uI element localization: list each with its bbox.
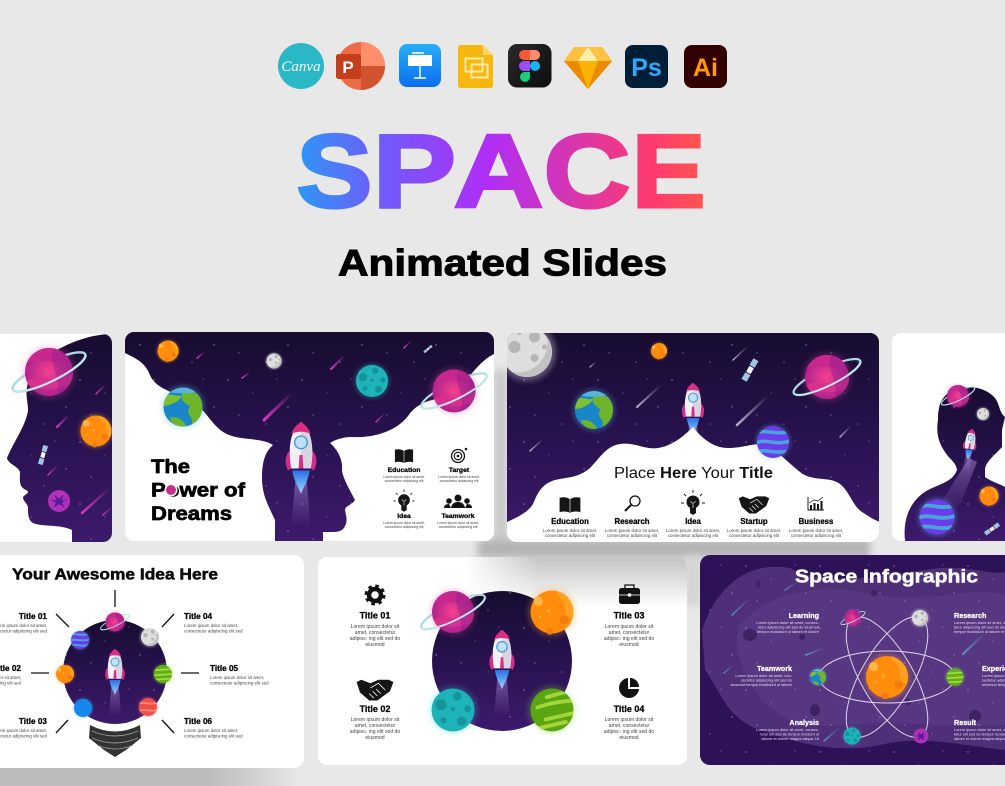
sky and head silhouette xyxy=(125,332,494,541)
title: P xyxy=(373,114,456,230)
label: Learning: Learning xyxy=(789,611,819,620)
rocket xyxy=(286,422,316,527)
heading: Power of xyxy=(151,480,246,502)
label: Title 04: Title 04 xyxy=(184,612,213,621)
item: Startup: Startup xyxy=(740,517,768,526)
item: Title 01: Lorem ipsum dolor sit xyxy=(351,624,400,630)
item: Research: Lorem ipsum dolor sit amet, xyxy=(605,528,659,533)
planet: ringed xyxy=(790,352,864,402)
rocket xyxy=(682,383,704,432)
item: Idea xyxy=(666,490,720,538)
heading: Space Infographic xyxy=(795,566,978,586)
label: Result: Result xyxy=(954,718,977,727)
icon: Figma xyxy=(508,44,552,88)
software icons row xyxy=(278,42,727,90)
title: A xyxy=(454,114,544,230)
item: Title 02: Title 02 xyxy=(360,704,390,714)
item: Title 04: eiusmod xyxy=(619,735,639,741)
item: Idea: consectetur adipiscing elit xyxy=(668,533,719,538)
label: Result xyxy=(954,718,1005,741)
item: Business xyxy=(789,497,843,538)
item: Title 04: Lorem ipsum dolor sit xyxy=(605,717,654,723)
planet: earth xyxy=(161,385,206,429)
item: Title 03: Lorem ipsum dolor sit xyxy=(605,624,654,630)
label: Title 06: consectetur adipiscing elit sed xyxy=(184,734,243,738)
icon: Canva: Canva xyxy=(281,59,321,75)
orbit planets xyxy=(809,609,965,746)
label: Title 04 xyxy=(184,612,243,634)
icon: satellite xyxy=(741,358,759,382)
rocket xyxy=(489,630,515,716)
item: Target: Target xyxy=(449,467,470,474)
planet: striped xyxy=(917,497,957,537)
panel: four titles slide xyxy=(318,557,687,765)
item: Research: consectetur adipiscing elit xyxy=(607,533,658,538)
item: Education xyxy=(383,449,425,483)
item: Education xyxy=(543,497,597,538)
label: Title 05 xyxy=(210,664,269,686)
planet: orange xyxy=(79,414,115,448)
planet: ringed xyxy=(9,345,89,399)
icon: PowerPoint: P xyxy=(342,58,354,77)
planet: striped xyxy=(755,424,791,460)
item: Title 01: amet, consectetur xyxy=(355,630,396,636)
bulb planets xyxy=(55,611,173,718)
label: Title 05: consectetur adipiscing elit sed xyxy=(210,680,269,686)
item: Idea xyxy=(383,489,425,529)
icon: satellite xyxy=(984,522,1000,536)
icon: satellite xyxy=(423,345,433,353)
planet: orange xyxy=(650,342,669,360)
planet: ringed xyxy=(939,384,977,408)
planet: moon xyxy=(976,407,990,421)
label: Teamwork: Teamwork xyxy=(757,664,792,673)
item: Title 04: adipisc- ing elit sed do xyxy=(604,729,654,735)
panel: Space Infographic slide xyxy=(700,555,1005,765)
label: Title 01 xyxy=(0,612,48,634)
item: Idea: Lorem ipsum dolor sit amet, xyxy=(666,528,720,533)
item: Education: consectetur adipiscing elit xyxy=(545,533,596,538)
label: Title 01: Title 01 xyxy=(19,612,47,621)
white mountain xyxy=(507,427,880,542)
label: Analysis: tetur elit sed do tempor incidunt ut xyxy=(760,732,820,736)
meteors xyxy=(724,582,985,741)
icon: satellite xyxy=(38,445,48,465)
item: Title 03: amet, consectetur xyxy=(609,630,650,636)
dark craters xyxy=(743,580,981,722)
heading: Dreams xyxy=(151,503,232,525)
planet: teal xyxy=(429,686,477,734)
item: Title 01: adipisc- ing elit sed do xyxy=(350,636,400,642)
rocket trail xyxy=(935,458,977,512)
icon: Keynote xyxy=(399,44,441,87)
label: Learning: tempor incididunt ut labore et dolore xyxy=(757,629,819,634)
label: Learning: tetur adipiscing elit sed do eiusmod xyxy=(758,624,819,630)
item: Title 02: adipisc- ing elit sed do xyxy=(350,729,400,735)
item: Title 02: amet, consectetur xyxy=(355,723,396,729)
label: Experience xyxy=(982,664,1005,687)
label: Title 03 xyxy=(0,717,48,738)
lightbulb xyxy=(63,620,167,757)
item: Idea: Idea xyxy=(685,517,701,526)
icon: Illustrator xyxy=(684,45,727,88)
item: Research: Research xyxy=(614,517,650,526)
item: Startup: consectetur adipiscing elit xyxy=(729,533,780,538)
planet: green xyxy=(528,686,576,734)
label: Title 05: Title 05 xyxy=(210,664,239,673)
item: Education: Lorem ipsum dolor sit amet, xyxy=(383,475,425,479)
item: Title 03: adipisc- ing elit sed do xyxy=(604,636,654,642)
icon: Illustrator: Ai xyxy=(693,54,718,82)
item: Title 04 xyxy=(604,678,654,741)
planet: orange xyxy=(156,339,181,363)
label: Teamwork: sectetur adipiscing elit sed do xyxy=(741,678,792,682)
item: Education: Lorem ipsum dolor sit amet, xyxy=(543,528,597,533)
item: Business: Lorem ipsum dolor sit amet, xyxy=(789,528,843,533)
icon: PowerPoint xyxy=(336,42,385,90)
item: Business: consectetur adipiscing elit xyxy=(791,533,842,538)
item: Teamwork xyxy=(437,494,479,529)
item: Title 02: eiusmod xyxy=(365,735,385,741)
icon: Sketch xyxy=(564,47,612,89)
label: Learning xyxy=(756,611,820,634)
card shadows xyxy=(0,370,870,786)
item: Title 01: Title 01 xyxy=(360,610,390,620)
title: S xyxy=(296,114,372,230)
heading xyxy=(151,456,246,525)
label: Analysis: Lorem ipsum dolor sit amet, consec- xyxy=(756,727,820,732)
item: Education: Education xyxy=(388,467,420,474)
label: Title 02 xyxy=(0,664,22,686)
label: Learning: Lorem ipsum dolor sit amet, consec- xyxy=(756,620,820,625)
title: C xyxy=(544,114,630,230)
item: Startup: Lorem ipsum dolor sit amet, xyxy=(727,528,781,533)
planet: moon xyxy=(265,352,283,370)
panel: person slide (right) xyxy=(892,333,1005,541)
heading: Your Awesome Idea Here xyxy=(12,566,218,584)
item: Education: Education xyxy=(551,517,589,526)
label: Title 05: Lorem ipsum dolor sit amet, xyxy=(210,675,264,680)
heading: The xyxy=(151,456,190,478)
label: Analysis xyxy=(756,718,820,741)
item: Title 03: eiusmod xyxy=(619,642,639,648)
item: Business: Business xyxy=(799,517,834,526)
item: Title 02 xyxy=(350,680,400,741)
label: Title 03: Title 03 xyxy=(19,717,47,726)
planet: purple xyxy=(48,490,70,512)
label: Research xyxy=(954,611,1005,634)
label: Title 06 xyxy=(184,717,243,738)
item: Target xyxy=(438,448,480,483)
icon: Photoshop: Ps xyxy=(631,54,662,82)
planet in heading xyxy=(164,485,178,496)
sun xyxy=(863,653,912,701)
icon: Google Slides xyxy=(458,45,493,88)
item: Target: Lorem ipsum dolor sit amet, xyxy=(438,475,480,479)
item: Teamwork: Lorem ipsum dolor sit amet, xyxy=(437,521,479,525)
subtitle: Animated Slides xyxy=(338,242,667,284)
item: Teamwork: Teamwork xyxy=(441,513,475,520)
item: Title 02: Lorem ipsum dolor sit xyxy=(351,717,400,723)
rocket xyxy=(959,428,979,475)
label: Teamwork: Lorem ipsum dolor sit amet, con- xyxy=(735,673,793,678)
item: Idea: Lorem ipsum dolor sit amet, xyxy=(383,521,425,525)
item: Title 04: amet, consectetur xyxy=(609,723,650,729)
label: Title 06: Title 06 xyxy=(184,717,213,726)
item: Idea: Idea xyxy=(397,513,411,520)
item: Title 01 xyxy=(350,586,400,648)
person silhouette xyxy=(905,387,1005,541)
item: Title 01: eiusmod xyxy=(365,642,385,648)
meteors xyxy=(197,341,411,422)
icon: Canva xyxy=(278,43,324,89)
item: Education: consectetur adipiscing elit xyxy=(385,479,423,483)
title: E xyxy=(632,114,706,230)
label: Research: Research xyxy=(954,611,986,620)
rocket xyxy=(105,649,125,716)
item: Idea: consectetur adipiscing elit xyxy=(385,525,423,529)
item: Title 04: Title 04 xyxy=(614,704,644,714)
face silhouette xyxy=(7,334,112,542)
label: Analysis: labore et dolore magna aliqua. Ut xyxy=(761,736,820,741)
label: Title 04: consectetur adipiscing elit sed xyxy=(184,628,243,634)
label: Teamwork: eiusmod tempor incididunt ut labore xyxy=(730,682,792,687)
nebula blobs xyxy=(700,555,1005,765)
planet: teal xyxy=(354,363,390,399)
central space circle xyxy=(432,591,572,731)
panel: Your Awesome Idea Here slide xyxy=(0,555,304,768)
ray lines xyxy=(31,590,199,733)
planet: orange xyxy=(978,485,1000,507)
icon: Photoshop xyxy=(625,45,668,88)
panel: face slide (left) xyxy=(0,334,115,542)
meteors xyxy=(48,384,112,515)
item: Research xyxy=(605,496,659,538)
item: Teamwork: consectetur adipiscing elit xyxy=(439,525,477,529)
item: Title 03 xyxy=(604,585,654,648)
heading: Place Here Your Title xyxy=(614,465,773,482)
label: Teamwork xyxy=(730,664,793,687)
panel: The Power of Dreams slide xyxy=(125,332,494,541)
orbits xyxy=(819,605,955,749)
planet: ringed xyxy=(418,367,490,415)
planet: ringed xyxy=(418,588,488,636)
planet: moon xyxy=(507,333,559,384)
label: Title 04: Lorem ipsum dolor sit amet, xyxy=(184,623,238,628)
label: Title 06: Lorem ipsum dolor sit amet, xyxy=(184,728,238,733)
item: Startup xyxy=(727,496,781,538)
panel: Place Here Your Title slide xyxy=(498,323,880,542)
planet: orange xyxy=(528,588,578,636)
item: Title 03: Title 03 xyxy=(614,610,644,620)
planet: earth xyxy=(573,389,617,431)
label: Analysis: Analysis xyxy=(789,718,819,727)
meteors xyxy=(530,346,851,451)
item: Target: consectetur adipiscing elit xyxy=(440,479,478,483)
